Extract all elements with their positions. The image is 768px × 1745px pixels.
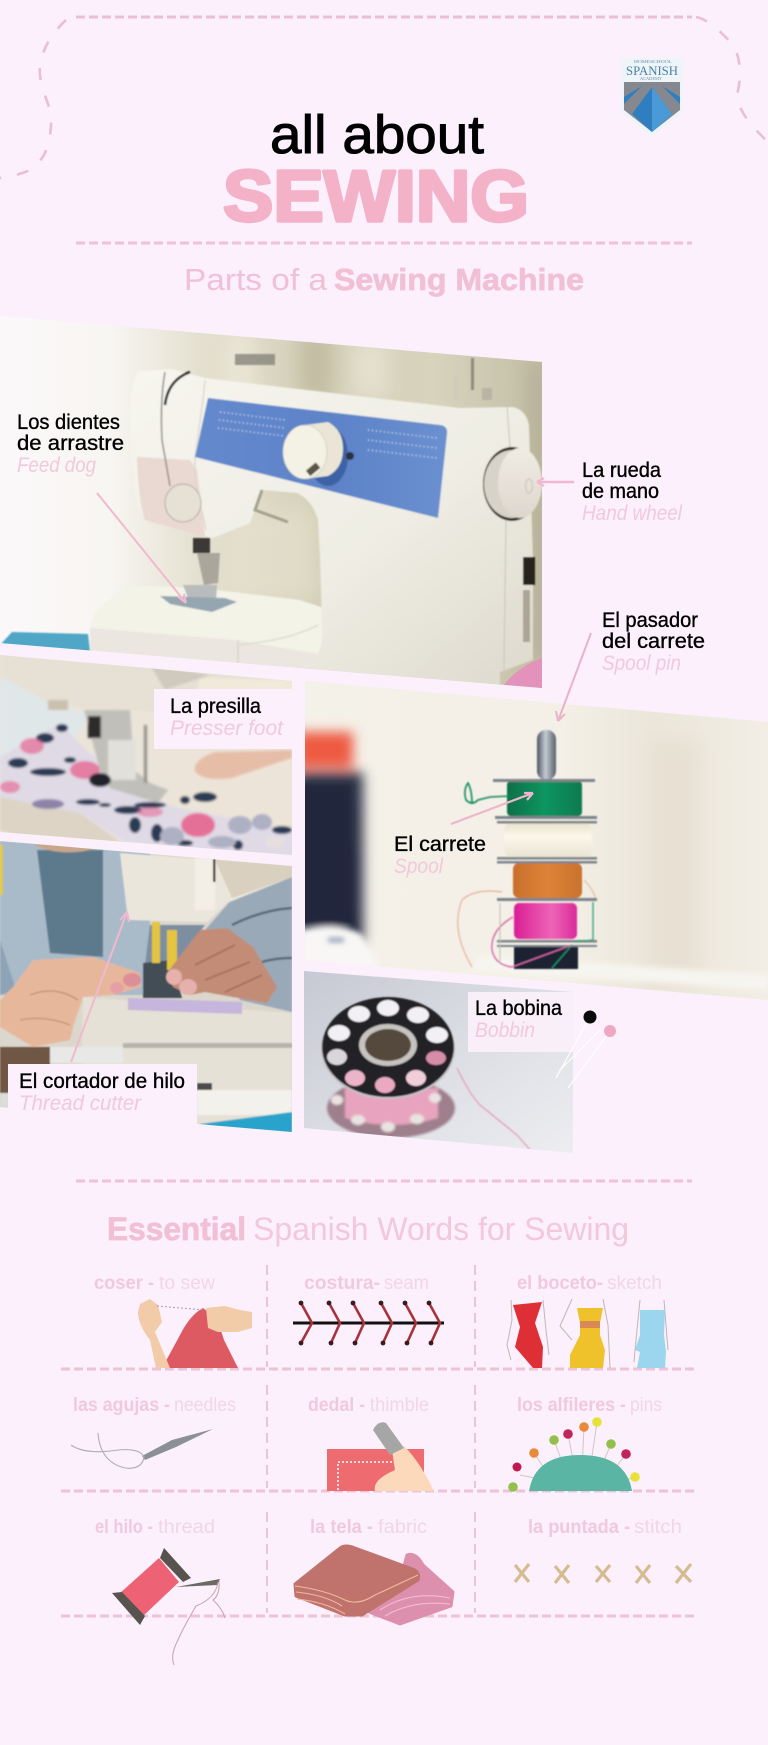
lower bobbin disc	[327, 1078, 455, 1138]
needle assembly	[193, 538, 210, 553]
label: El pasador del carrete: del carrete	[602, 630, 705, 653]
icon: seam stitches	[293, 1301, 444, 1345]
label: La rueda de mano: Hand wheel	[582, 502, 683, 525]
table	[0, 798, 120, 842]
arrow: hand wheel	[537, 478, 574, 486]
word: coser: to sew	[159, 1273, 215, 1294]
icon: thimble on fabric	[327, 1422, 434, 1491]
upper bobbin disc	[322, 1033, 455, 1100]
heading: Essential Spanish Words for Sewing: Essential	[107, 1211, 246, 1247]
label: El cortador de hilo: Thread cutter	[19, 1092, 142, 1115]
small left dial	[165, 484, 201, 522]
arrow: spool	[451, 793, 533, 824]
word: la puntada: la puntada -	[528, 1517, 630, 1538]
icon: thread spool and needle	[112, 1548, 225, 1665]
presser foot	[84, 710, 168, 803]
label: El carrete	[394, 833, 486, 878]
label: El pasador del carrete: Spool pin	[602, 652, 681, 675]
label: La presilla: Presser foot	[170, 717, 284, 740]
panel: presser foot photo	[0, 650, 293, 858]
label: El cortador de hilo: El cortador de hilo	[19, 1070, 185, 1093]
divider	[76, 1180, 692, 1182]
selector dial	[314, 430, 348, 486]
icon: folded fabric	[295, 1546, 453, 1624]
word: el hilo: thread	[158, 1517, 215, 1538]
label: La rueda de mano	[582, 459, 683, 525]
label: El cortador de hilo	[8, 1064, 197, 1130]
hand wheel	[482, 446, 524, 522]
logo: Homeschool Spanish Academy shield	[621, 58, 683, 137]
word: el hilo	[95, 1517, 225, 1665]
label: Los dientes de arrastre: Los dientes	[17, 411, 120, 434]
heading: Parts of a Sewing Machine: Sewing Machine	[334, 262, 584, 297]
icon: sewing pins	[556, 1010, 616, 1088]
machine head	[120, 853, 292, 922]
icon: pin cushion	[508, 1417, 640, 1492]
word: dedal	[308, 1395, 434, 1491]
end cap shading	[137, 457, 205, 537]
label: El carrete: Spool	[394, 855, 444, 878]
loose threads	[465, 783, 510, 804]
blue control panel	[195, 398, 447, 518]
spool stack	[458, 730, 597, 969]
machine base	[91, 587, 323, 654]
heading: Essential Spanish Words for Sewing: Spanish Words for Sewing	[253, 1211, 629, 1247]
right hand	[167, 928, 277, 1003]
word: las agujas: needles	[174, 1395, 236, 1416]
label: Los dientes de arrastre	[17, 411, 124, 477]
label: La bobina: La bobina	[475, 997, 562, 1020]
label: Los dientes de arrastre: Feed dog	[17, 454, 96, 477]
heading: Parts of a Sewing Machine: Parts of a	[184, 262, 328, 297]
word: costura: seam	[384, 1273, 429, 1294]
word: coser	[94, 1273, 252, 1368]
pink thread	[457, 1068, 532, 1152]
word: las agujas: las agujas -	[73, 1395, 170, 1416]
icon: hands holding fabric	[138, 1299, 252, 1368]
sweater	[37, 850, 103, 957]
word: la tela: la tela -	[310, 1517, 373, 1538]
machine body	[90, 354, 542, 700]
panel: bobbin photo	[304, 971, 574, 1161]
machine head and column	[130, 369, 533, 700]
feed dog plate	[160, 596, 237, 612]
icon: dress sketches	[507, 1299, 668, 1368]
label: La rueda de mano: La rueda	[582, 459, 661, 482]
label: La presilla: La presilla	[170, 695, 261, 718]
logo: Homeschool Spanish Academy shield: SPANISH	[626, 63, 678, 78]
machine head	[2, 655, 256, 678]
label: Los dientes de arrastre: de arrastre	[17, 432, 124, 455]
floral fabric	[0, 723, 293, 858]
bobbin label box	[468, 992, 573, 1052]
top stitched border	[0, 17, 768, 178]
word: el hilo: el hilo -	[95, 1517, 153, 1538]
word: la puntada	[515, 1517, 691, 1583]
word: la puntada: stitch	[634, 1517, 682, 1538]
word: el boceto: el boceto-	[517, 1273, 603, 1294]
word: los alfileres	[508, 1395, 662, 1492]
label: El carrete: El carrete	[394, 833, 486, 856]
arrow: thread cutter	[71, 912, 129, 1062]
machine bed	[80, 997, 292, 1132]
jacket	[0, 841, 150, 995]
panel: thread cutter photo	[0, 838, 293, 1135]
spool pins	[454, 377, 458, 400]
panel: sewing machine photo	[0, 316, 544, 700]
logo: Homeschool Spanish Academy shield: ACADEMY	[640, 76, 662, 81]
center jacket and tape	[145, 924, 206, 964]
heading: Parts of a Sewing Machine	[184, 262, 584, 297]
icon: cross stitches	[515, 1564, 691, 1583]
right sleeve	[205, 873, 292, 1012]
divider	[76, 242, 692, 244]
logo: Homeschool Spanish Academy shield: HOMESCHOOL	[634, 59, 673, 64]
panel: spool photo	[295, 681, 768, 1001]
word: dedal: thimble	[370, 1395, 429, 1416]
word: la tela: fabric	[378, 1517, 427, 1538]
title	[223, 105, 529, 237]
word: el boceto: sketch	[607, 1273, 662, 1294]
word: el boceto	[507, 1273, 668, 1368]
vocabulary grid lines	[61, 1265, 695, 1616]
word: dedal: dedal -	[308, 1395, 365, 1416]
label: La bobina: Bobbin	[475, 1019, 535, 1042]
label: La rueda de mano: de mano	[582, 480, 659, 503]
label: El pasador del carrete: El pasador	[602, 609, 698, 632]
word: la tela	[295, 1517, 453, 1624]
teal cloth	[0, 632, 90, 652]
word: costura: costura-	[304, 1273, 380, 1294]
word: coser: coser -	[94, 1273, 154, 1294]
title line: SEWING: SEWING	[223, 157, 529, 237]
word: los alfileres: pins	[630, 1395, 662, 1416]
finger	[195, 750, 292, 779]
side panel line	[504, 405, 510, 670]
word: costura	[293, 1273, 444, 1345]
left hand	[0, 957, 141, 1047]
blurred background objects	[295, 732, 363, 942]
label: La bobina	[475, 997, 562, 1042]
icon: needle and thread	[71, 1429, 213, 1468]
label: La presilla	[154, 689, 296, 749]
arrow: spool pin	[556, 633, 591, 721]
arrow: feed dog	[97, 493, 186, 603]
label: El pasador del carrete	[602, 609, 705, 675]
side switches	[523, 557, 535, 585]
word: los alfileres: los alfileres -	[517, 1395, 626, 1416]
wall	[0, 678, 87, 756]
word: las agujas	[71, 1395, 236, 1468]
pink fabric	[504, 658, 542, 688]
title line: all about: all about	[270, 105, 484, 165]
